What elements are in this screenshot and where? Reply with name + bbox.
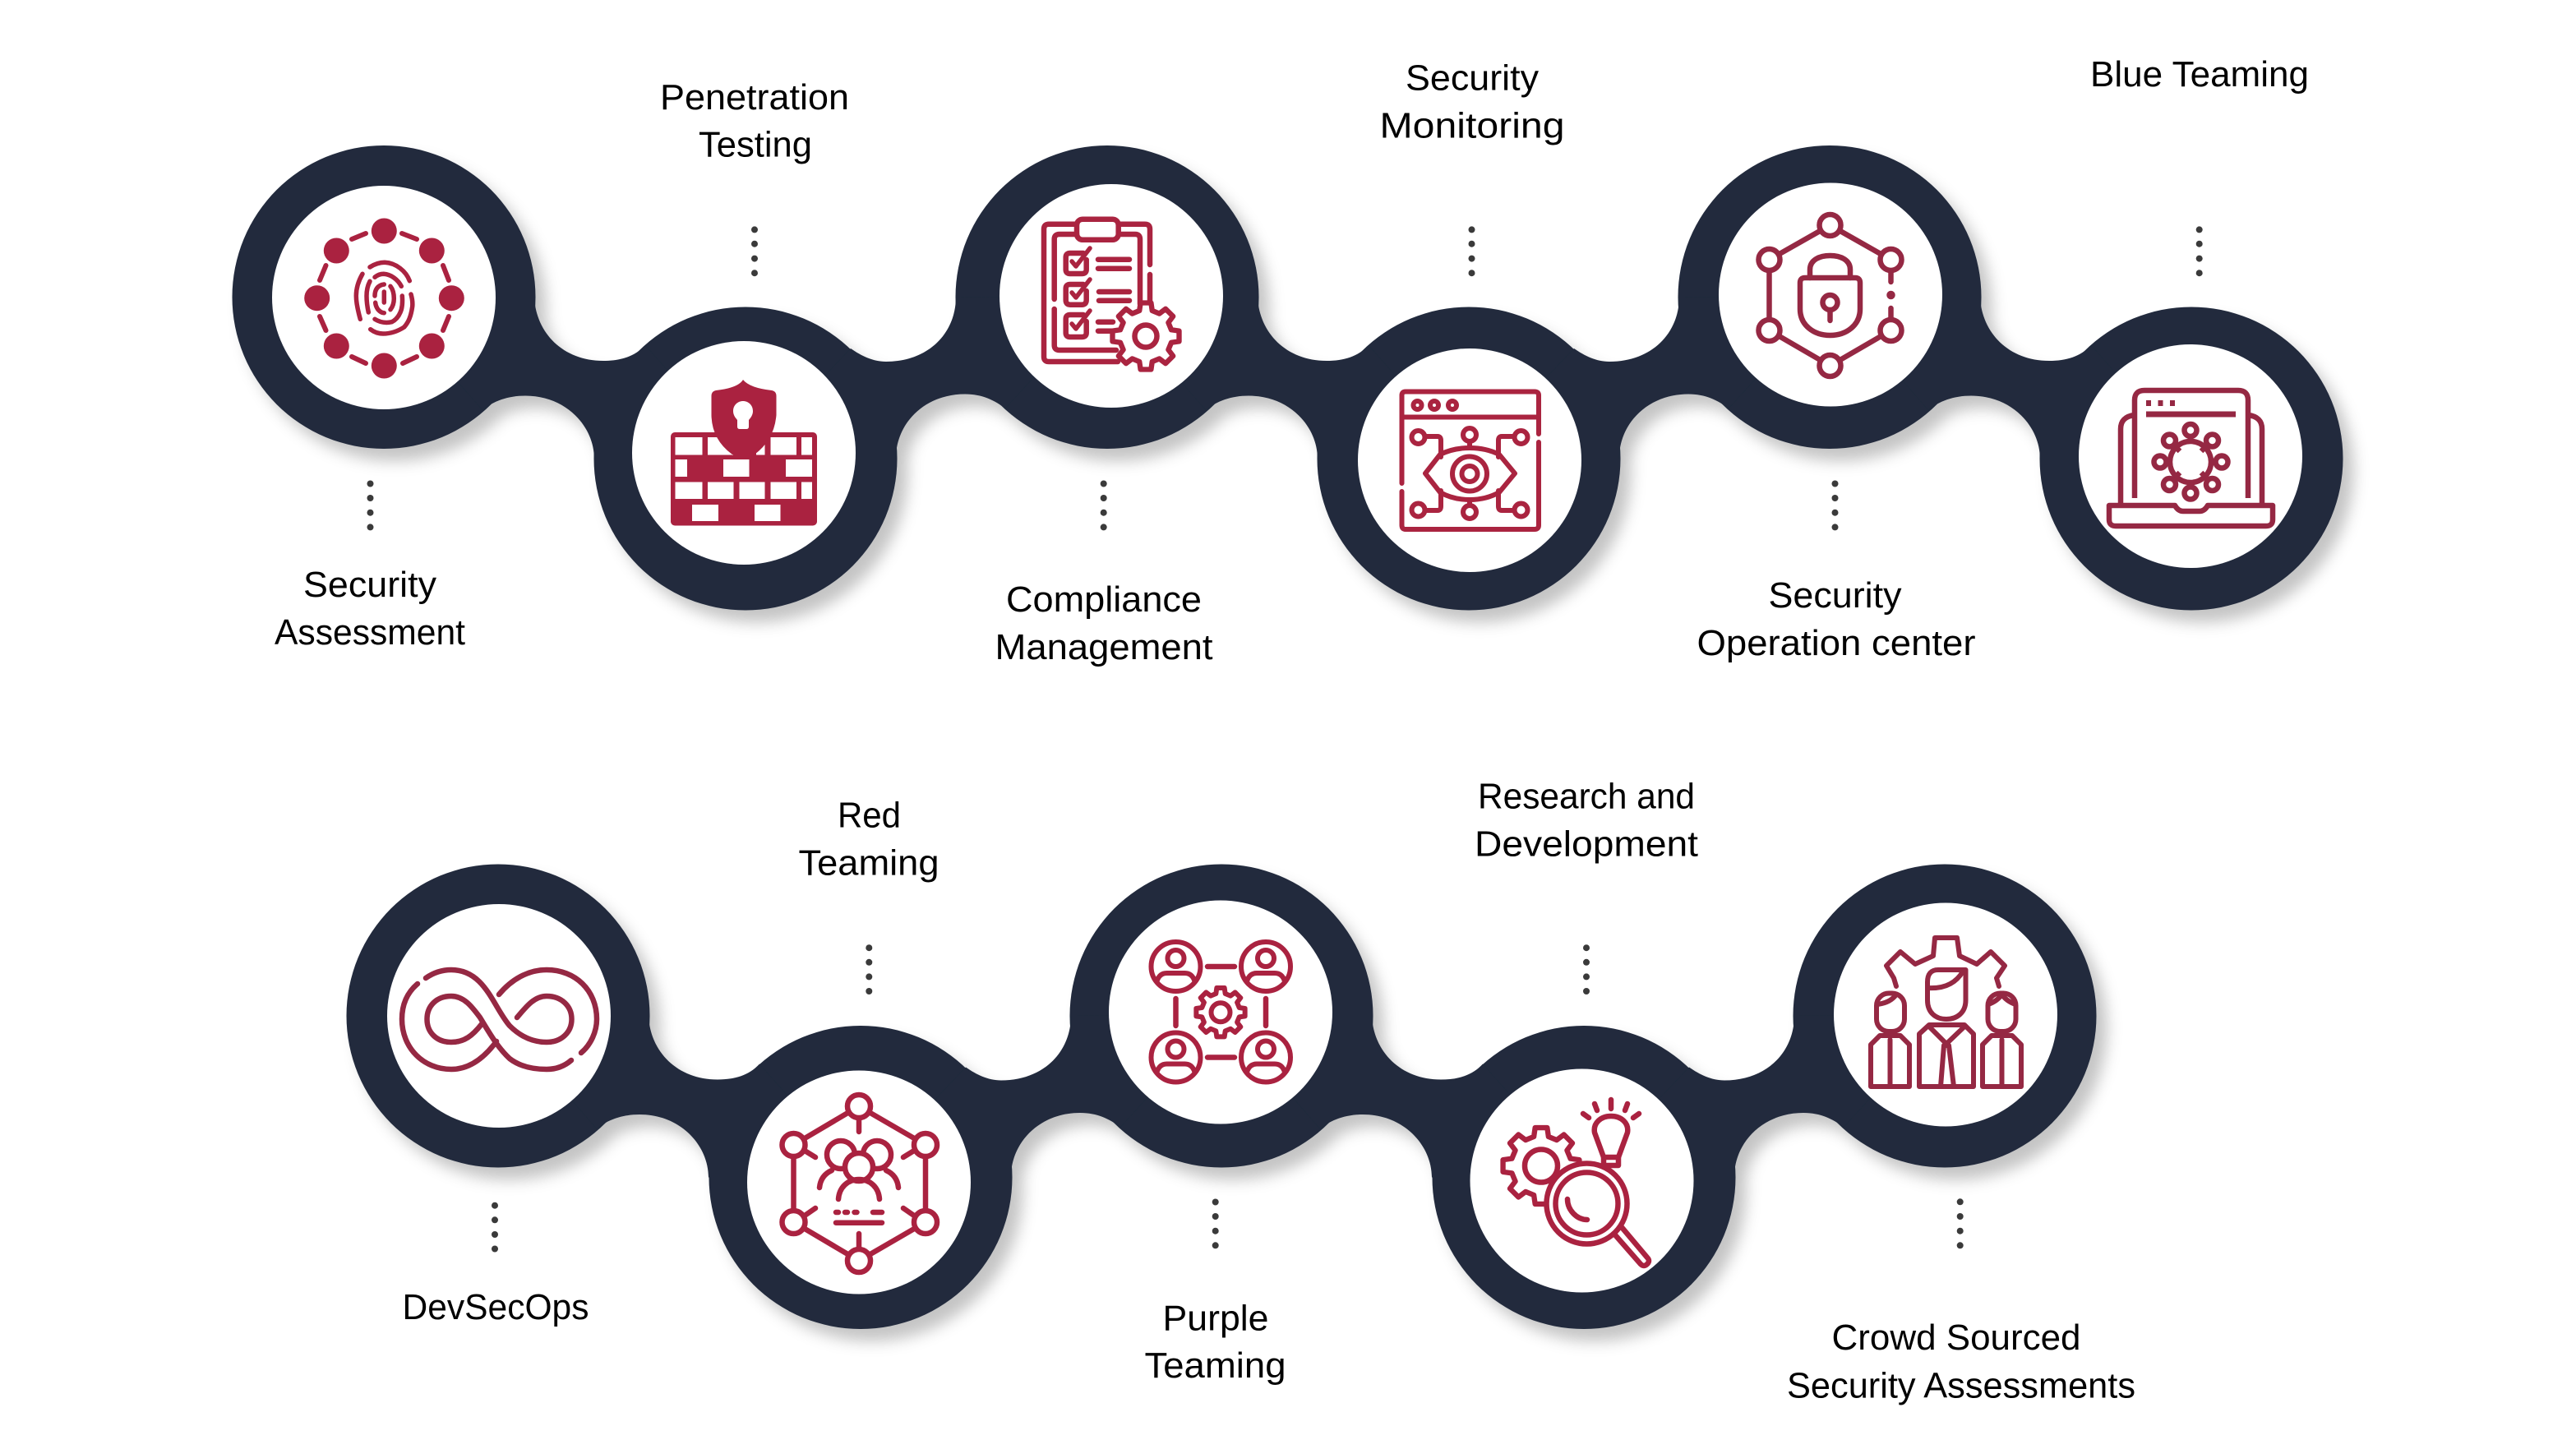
- label: Purple Teaming: Purple: [1162, 1299, 1269, 1338]
- label: Security Assessment: [275, 565, 465, 653]
- label: Red Teaming: [799, 796, 939, 883]
- label: Crowd Sourced Security Assessments: Security Assessments: [1787, 1366, 2135, 1405]
- icon: browser window with eye: [1402, 391, 1539, 529]
- label: Security Monitoring: Security: [1406, 58, 1539, 99]
- node: purple teaming disc: [1109, 901, 1332, 1124]
- node: crowd sourced disc: [1834, 902, 2057, 1126]
- connector dots: Crowd Sourced: [1957, 1198, 1964, 1248]
- label: Purple Teaming: [1144, 1299, 1286, 1386]
- label: Security Operation center: [1697, 575, 1976, 663]
- label: Purple Teaming: Teaming: [1144, 1345, 1286, 1386]
- label: Research and Development: [1475, 776, 1698, 865]
- label: Compliance Management: Management: [995, 627, 1213, 667]
- label: Red Teaming: Teaming: [799, 843, 939, 883]
- icon: checklist clipboard with gear: [1044, 219, 1180, 370]
- label: Security Monitoring: [1379, 58, 1565, 146]
- connector dots: Purple Teaming: [1212, 1198, 1219, 1248]
- icon: firewall with shield: [671, 380, 817, 526]
- connector dots: Security Assessment: [367, 480, 373, 530]
- label: Crowd Sourced Security Assessments: [1787, 1317, 2135, 1405]
- label: Security Assessment: Assessment: [275, 612, 465, 653]
- ribbon: bottom row: [347, 865, 2096, 1329]
- node: security operation center disc: [1719, 182, 1942, 406]
- node: security monitoring disc: [1358, 348, 1581, 572]
- label: Research and Development: Development: [1475, 824, 1698, 865]
- node: devsecops disc: [387, 904, 611, 1128]
- label: Penetration Testing: [660, 77, 849, 164]
- label: Blue Teaming: Blue Teaming: [2090, 54, 2309, 95]
- connector dots: Compliance Management: [1101, 480, 1107, 530]
- label: Crowd Sourced Security Assessments: Crowd Sourced: [1831, 1317, 2081, 1358]
- connector dots: Security Monitoring: [1468, 226, 1475, 276]
- connector dots: Red Teaming: [866, 944, 872, 994]
- node: penetration testing disc: [632, 341, 856, 565]
- icon: three people under a gear: [1871, 938, 2021, 1087]
- connector dots: Research and Development: [1583, 944, 1590, 994]
- connector dots: Blue Teaming: [2196, 226, 2203, 276]
- icon: gear, magnifier and light bulb: [1503, 1100, 1649, 1266]
- label: Penetration Testing: Penetration: [660, 77, 849, 118]
- icon: laptop with virus: [2109, 390, 2273, 526]
- icon: four people around a gear: [1151, 942, 1290, 1082]
- connector dots: Security Operation center: [1831, 480, 1838, 530]
- label: Security Operation center: Security: [1769, 575, 1902, 616]
- label: Security Monitoring: Monitoring: [1379, 105, 1565, 146]
- ribbon: top row: [232, 145, 2343, 610]
- icon: team in hexagon network: [782, 1095, 937, 1272]
- label: Red Teaming: Red: [838, 796, 901, 835]
- label: Security Assessment: Security: [303, 565, 436, 605]
- icon: infinity loop: [402, 970, 597, 1069]
- label: Compliance Management: Compliance: [1006, 579, 1202, 620]
- node: security assessment disc: [272, 186, 496, 409]
- label: Research and Development: Research and: [1478, 776, 1695, 817]
- icon: fingerprint ring: [304, 219, 464, 378]
- label: Security Operation center: Operation center: [1697, 623, 1976, 663]
- label: DevSecOps: DevSecOps: [403, 1287, 589, 1327]
- label: Compliance Management: [995, 579, 1213, 667]
- node: red teaming disc: [747, 1070, 971, 1294]
- node: research and development disc: [1470, 1068, 1693, 1292]
- connector dots: Penetration Testing: [751, 226, 758, 276]
- node: compliance management disc: [999, 184, 1223, 408]
- label: Penetration Testing: Testing: [699, 125, 812, 164]
- connector dots: DevSecOps: [492, 1202, 498, 1253]
- icon: padlock in hexagon network: [1759, 215, 1902, 376]
- node: blue teaming disc: [2079, 344, 2302, 568]
